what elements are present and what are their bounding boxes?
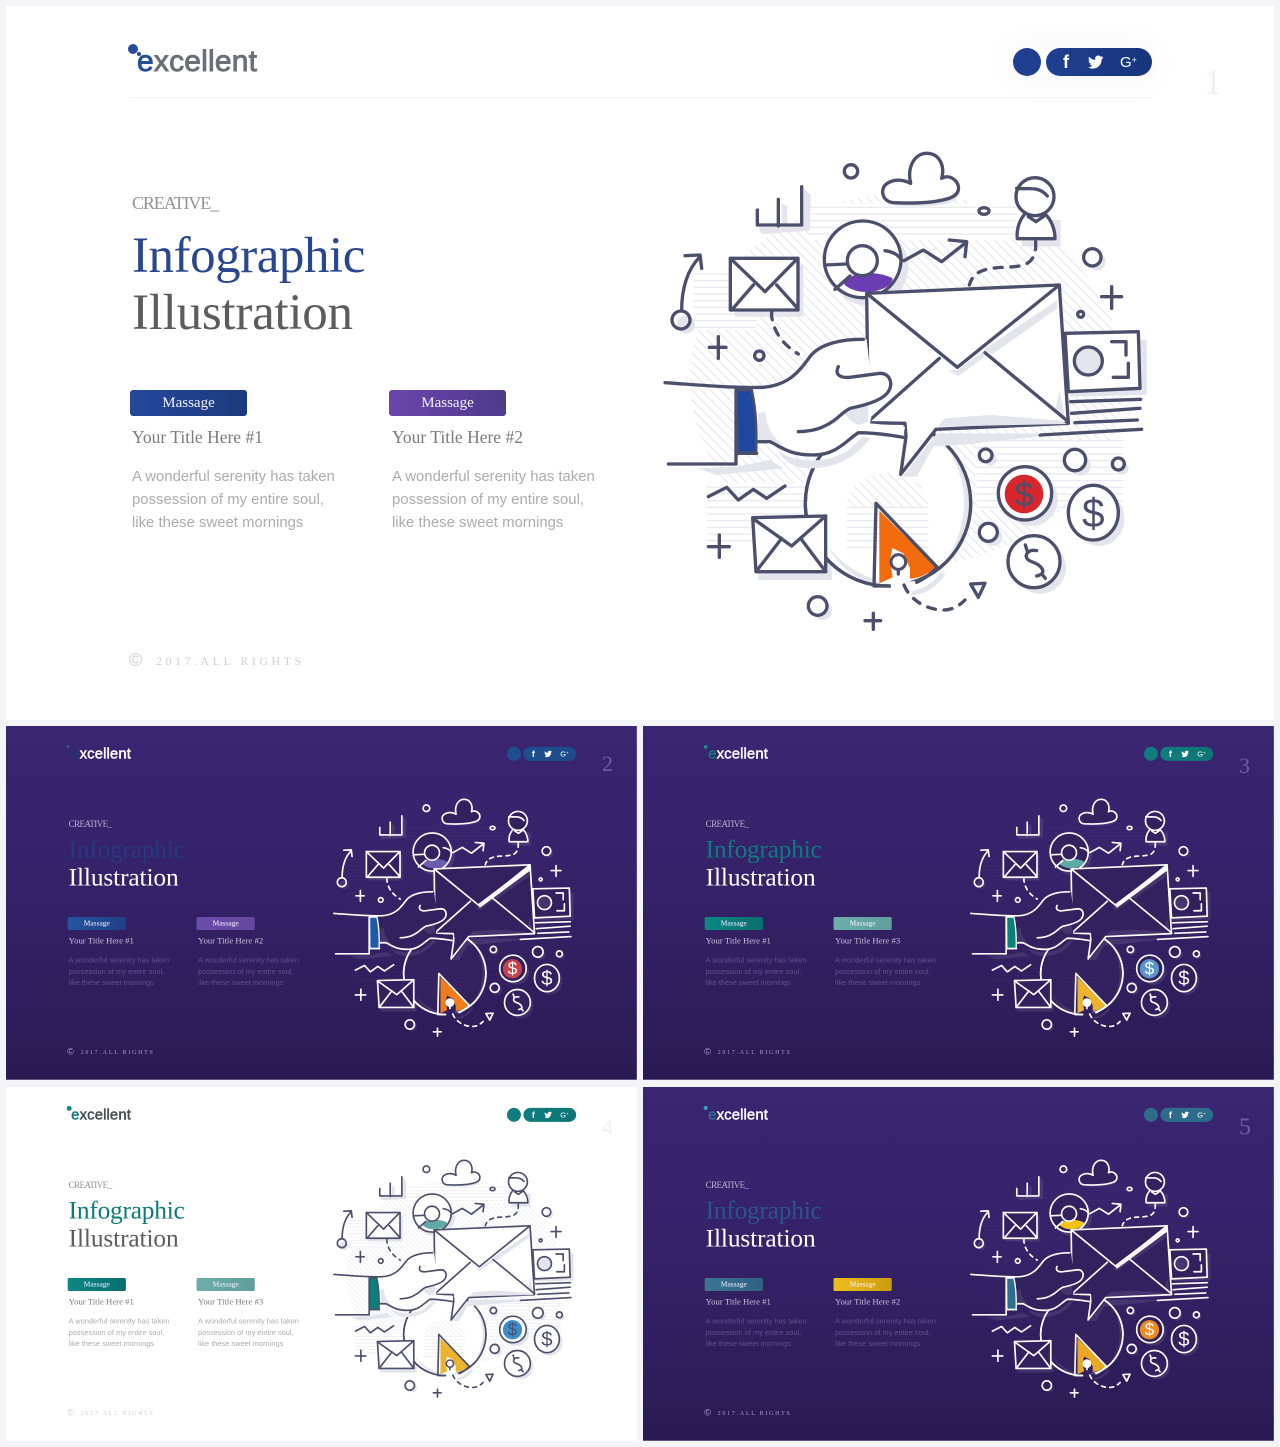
social buttons: f [532, 749, 535, 759]
kicker: CREATIVE_ [706, 1180, 749, 1190]
button 2: Massage [850, 1281, 876, 1288]
small envelope upper left [730, 258, 798, 310]
social buttons: f [532, 1110, 535, 1120]
coin: tilted dollar [1008, 536, 1060, 588]
dashed pointer and triangle [904, 583, 985, 610]
button 1: Massage [162, 395, 215, 411]
button 2: Massage [421, 395, 474, 411]
speech bubble circle [805, 421, 971, 596]
copyright footer: © [704, 1046, 711, 1056]
curved arrow [672, 255, 702, 329]
button 2 [834, 1278, 892, 1291]
social buttons [507, 746, 576, 761]
kicker: CREATIVE_ [69, 1180, 112, 1190]
title [132, 228, 365, 341]
floating circles [979, 449, 1124, 541]
copyright footer [704, 1046, 792, 1056]
copyright footer: © [67, 1046, 74, 1056]
icon: money bill [1040, 332, 1142, 435]
copyright footer: 2017.ALL RIGHTS [81, 1409, 155, 1416]
logo: excellent [708, 745, 768, 762]
title: Infographic [69, 1196, 185, 1224]
button 1 [68, 1278, 126, 1291]
icon: circle [1084, 249, 1101, 266]
slide number: 4 [602, 1114, 613, 1139]
title: Infographic [132, 228, 365, 284]
copyright footer: 2017.ALL RIGHTS [718, 1409, 792, 1416]
panel 4: white slide, teal accent [6, 1087, 637, 1441]
title: Illustration [706, 864, 816, 892]
social buttons: f [1169, 1110, 1172, 1120]
button 2 [197, 1278, 255, 1291]
item title 1: Your Title Here #1 [132, 427, 263, 447]
copyright footer [704, 1407, 792, 1417]
body text 2: A wonderful serenity has taken possession of my entire soul, like these sweet mornings [835, 956, 936, 987]
kicker: CREATIVE_ [69, 819, 112, 829]
button 2: Massage [213, 920, 239, 927]
copyright footer [67, 1046, 155, 1056]
kicker: CREATIVE_ [132, 193, 218, 213]
slide number: 3 [1239, 753, 1250, 778]
item title 1: Your Title Here #1 [69, 935, 134, 945]
icon: dot [1078, 311, 1084, 317]
social buttons: f [1063, 52, 1069, 72]
hatched background [650, 140, 1183, 673]
body text 1: A wonderful serenity has taken possession of my entire soul, like these sweet mornings [706, 1317, 807, 1348]
button 2 [197, 917, 255, 930]
pie slice [874, 503, 937, 586]
copyright footer: © [67, 1407, 74, 1417]
button 2: Massage [213, 1281, 239, 1288]
social buttons: G+ [1197, 1111, 1206, 1119]
body text 1: A wonderful serenity has taken possession of my entire soul, like these sweet mornings [132, 469, 335, 531]
panel 2: purple slide, blue accent [6, 726, 637, 1080]
body text 2: A wonderful serenity has taken possession of my entire soul, like these sweet mornings [835, 1317, 936, 1348]
icon: plus [1102, 287, 1122, 308]
illustration: hand holding envelope [970, 798, 1210, 1037]
dashed connector [772, 312, 798, 354]
button 2 [834, 917, 892, 930]
item title 1: Your Title Here #1 [706, 1296, 771, 1306]
button 2 [389, 390, 506, 416]
icon: cloud [883, 153, 959, 203]
item title 2: Your Title Here #2 [392, 427, 523, 447]
illustration: hand holding envelope [970, 1160, 1210, 1398]
icon: donut user [824, 221, 902, 298]
illustration: hand holding envelope [333, 1160, 574, 1398]
slide number: 1 [1204, 62, 1222, 102]
arrow: zigzag trend [904, 240, 967, 262]
copyright footer [67, 1407, 155, 1417]
dashed connector [969, 242, 1036, 285]
copyright footer: 2017.ALL RIGHTS [718, 1048, 792, 1055]
illustration: hand holding envelope [333, 798, 574, 1037]
copyright footer [129, 650, 305, 670]
social buttons: G+ [560, 750, 569, 758]
title [69, 1196, 185, 1253]
panel 5: purple slide, gold accent [643, 1087, 1274, 1441]
title: Infographic [69, 835, 185, 863]
item title 2: Your Title Here #2 [835, 1296, 900, 1306]
copyright footer: © [704, 1407, 711, 1417]
item title 1: Your Title Here #1 [69, 1296, 134, 1306]
title: Infographic [706, 1196, 822, 1224]
button 1 [130, 390, 247, 416]
logo: excellent [71, 1106, 131, 1123]
title: Illustration [706, 1225, 816, 1253]
logo: excellent [137, 45, 257, 78]
plus and dot [709, 337, 764, 360]
item title 2: Your Title Here #3 [835, 935, 900, 945]
social buttons: G+ [1197, 750, 1206, 758]
drop shadows [677, 188, 1147, 620]
title: Illustration [132, 285, 353, 341]
panel 3: purple slide, teal accent [643, 726, 1274, 1080]
logo: excellent [71, 745, 131, 762]
panel 1: main white slide [6, 6, 1274, 720]
title [69, 835, 185, 892]
item title 1: Your Title Here #1 [706, 935, 771, 945]
plus [708, 535, 729, 557]
title: Infographic [706, 835, 822, 863]
icon: bar chart [757, 187, 802, 226]
social buttons: G+ [1120, 54, 1137, 71]
copyright footer: © [129, 650, 142, 670]
social buttons [1013, 48, 1152, 76]
coin: highlighted dollar [998, 467, 1052, 520]
body text 2: A wonderful serenity has taken possession of my entire soul, like these sweet mornings [198, 956, 299, 987]
button 1 [705, 1278, 763, 1291]
small envelope lower left [753, 516, 826, 572]
icon: small ellipse [979, 208, 989, 214]
illustration: hand holding envelope [663, 152, 1147, 631]
coin: dollar [1068, 485, 1118, 540]
button 1 [705, 917, 763, 930]
title: Illustration [69, 864, 179, 892]
coin: dollar: $ [1082, 490, 1105, 536]
copyright footer: 2017.ALL RIGHTS [81, 1048, 155, 1055]
button 1: Massage [721, 1281, 747, 1288]
body text 2: A wonderful serenity has taken possession of my entire soul, like these sweet mornings [198, 1317, 299, 1348]
slide number: 5 [1239, 1113, 1251, 1140]
button 1: Massage [84, 1281, 110, 1288]
kicker: CREATIVE_ [706, 819, 749, 829]
button 1 [68, 917, 126, 930]
body text 1: A wonderful serenity has taken possession of my entire soul, like these sweet mornings [706, 956, 807, 987]
social buttons [507, 1108, 576, 1122]
social buttons [1144, 746, 1214, 761]
logo: excellent [708, 1106, 768, 1123]
button 1: Massage [721, 920, 747, 927]
title [706, 1196, 822, 1253]
button 2: Massage [850, 920, 876, 927]
social buttons [1144, 1108, 1214, 1122]
circles and plus at bottom [808, 597, 881, 629]
body text 1: A wonderful serenity has taken possession of my entire soul, like these sweet mornings [69, 956, 170, 987]
social buttons: G+ [560, 1111, 569, 1119]
copyright footer: 2017.ALL RIGHTS [156, 654, 305, 668]
icon: small circle [844, 165, 858, 178]
item title 2: Your Title Here #2 [198, 935, 263, 945]
social buttons: f [1169, 749, 1172, 759]
body text 1: A wonderful serenity has taken possession of my entire soul, like these sweet mornings [69, 1317, 170, 1348]
envelope with speech tail [867, 285, 1068, 477]
button 1: Massage [84, 920, 110, 927]
item title 2: Your Title Here #3 [198, 1296, 263, 1306]
wave line [708, 486, 785, 500]
title: Illustration [69, 1225, 179, 1253]
slide number: 2 [602, 751, 613, 776]
body text 2: A wonderful serenity has taken possession of my entire soul, like these sweet mornings [392, 469, 595, 531]
icon: person [1016, 178, 1055, 239]
hand [665, 339, 905, 468]
title [706, 835, 822, 892]
coin: highlighted dollar: $ [1014, 476, 1034, 514]
